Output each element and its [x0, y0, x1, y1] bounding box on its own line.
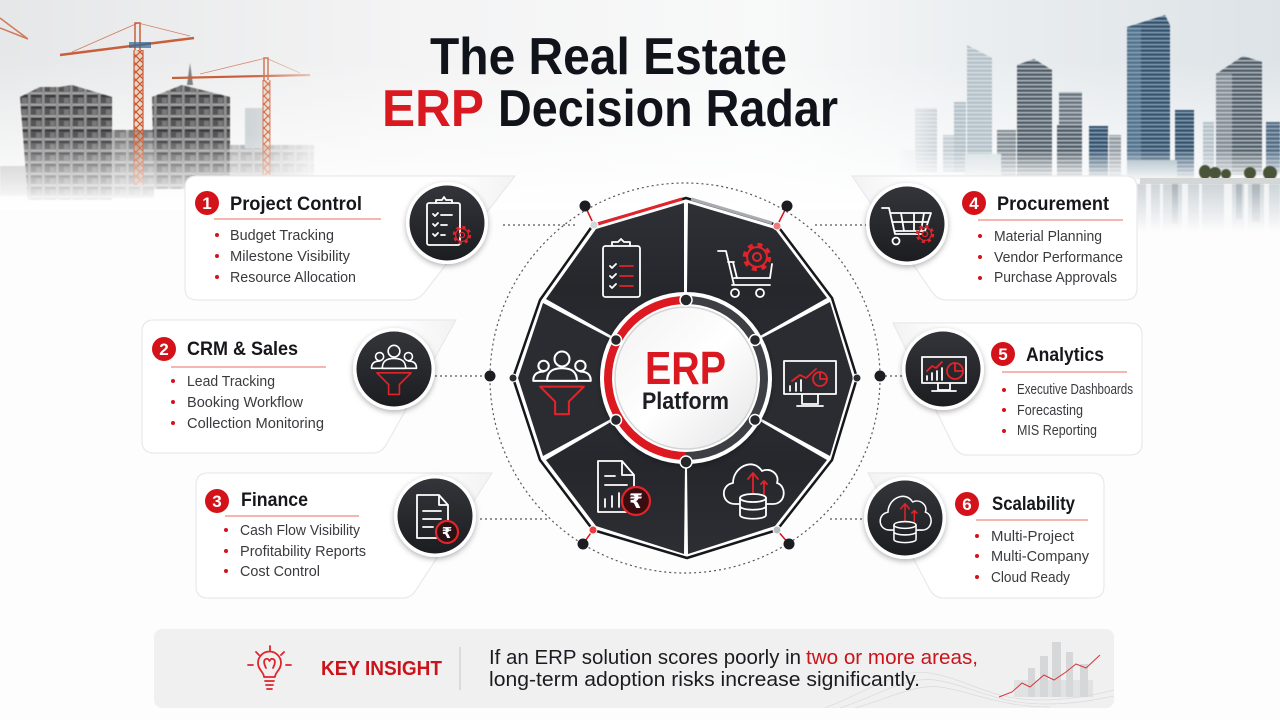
icon: crm badge: [353, 328, 435, 410]
badge 4: 4: [969, 194, 979, 213]
badge 6: [955, 492, 979, 516]
items: MIS Reporting: [1017, 423, 1097, 439]
items: Executive Dashboards: [1017, 382, 1133, 398]
heading: CRM & Sales: [187, 339, 298, 360]
title: The Real Estate: [430, 28, 787, 86]
hub disc: [615, 307, 757, 449]
segment: crm: [518, 303, 686, 456]
items: Milestone Visibility: [230, 249, 351, 265]
heading: Analytics: [1026, 345, 1104, 366]
items: Resource Allocation: [230, 270, 356, 286]
heading: Finance: [241, 490, 308, 511]
segment: procurement: [686, 203, 827, 378]
outer dashed radar circle: [490, 183, 880, 573]
segment: finance: [546, 378, 686, 554]
wheel icon: clipboard: [603, 239, 640, 297]
items: Multi-Company: [991, 549, 1090, 565]
wheel icon: document rupee: [598, 461, 650, 515]
card 6: scalability: [868, 473, 1104, 598]
wheel icon: people funnel: [533, 352, 591, 414]
icon: project control badge: [406, 182, 488, 264]
items: [978, 229, 1123, 286]
items: Cash Flow Visibility: [240, 523, 361, 539]
segment: scalability: [686, 378, 827, 554]
items: Cloud Ready: [991, 570, 1071, 586]
items: Lead Tracking: [187, 374, 275, 390]
heading: Project Control: [230, 194, 362, 215]
icon: analytics badge: [902, 328, 984, 410]
items: Cost Control: [240, 564, 320, 580]
card 1: project control: [185, 176, 515, 300]
header sky background: [0, 0, 1280, 210]
card 2: crm and sales: [142, 320, 456, 453]
badge 4: [962, 191, 986, 215]
hub label: [642, 342, 729, 415]
label: KEY INSIGHT: [321, 658, 442, 680]
badge 1: 1: [202, 194, 212, 213]
hub ring: dark half: [686, 300, 764, 456]
badge 5: [991, 342, 1015, 366]
connector nodes: [484, 200, 886, 550]
wheel icon: cloud database: [724, 464, 784, 519]
badge 2: 2: [159, 340, 169, 359]
items: Booking Workflow: [187, 395, 304, 411]
wheel icon: cart and gear: [718, 245, 772, 297]
items: Collection Monitoring: [187, 416, 324, 432]
items: Budget Tracking: [230, 228, 334, 244]
title: [382, 28, 838, 138]
icon: finance badge: [394, 475, 476, 557]
mini skyline chart: [825, 642, 1114, 708]
heading: Scalability: [992, 494, 1075, 515]
icon: scalability badge: [864, 477, 946, 559]
insight text: If an ERP solution scores poorly in: [489, 647, 801, 669]
items: Forecasting: [1017, 403, 1083, 419]
icon: finance badge: ₹: [442, 525, 452, 542]
segment: analytics: [686, 302, 853, 456]
hub outer ring: [600, 292, 772, 464]
badge 6: 6: [962, 495, 972, 514]
accent edges: [598, 199, 772, 224]
items: Multi-Project: [991, 529, 1074, 545]
badge 2: [152, 337, 176, 361]
wheel icon: monitor analytics: [784, 361, 836, 406]
items: Profitability Reports: [240, 544, 366, 560]
items: [215, 228, 356, 286]
badge 3: 3: [212, 492, 222, 511]
hub ring: red half: [608, 300, 686, 456]
insight text: two or more areas,: [806, 647, 978, 669]
items: [1002, 382, 1133, 439]
items: Purchase Approvals: [994, 270, 1117, 286]
key insight bar: [154, 629, 1114, 708]
badge 1: [195, 191, 219, 215]
wheel icon: document rupee: ₹: [629, 491, 643, 513]
icon: lightbulb: [248, 646, 291, 689]
items: [975, 529, 1090, 586]
hub label: Platform: [642, 388, 729, 415]
skyline photo: [900, 15, 1280, 234]
outer ring: [513, 198, 857, 558]
items: [171, 374, 324, 432]
card 3: finance: [196, 473, 492, 598]
badge 5: 5: [998, 345, 1008, 364]
title: Decision Radar: [498, 80, 838, 138]
badge 3: [205, 489, 229, 513]
segment: project control: [546, 203, 686, 378]
card 4: procurement: [852, 176, 1137, 300]
construction site photo: [0, 18, 314, 200]
connector lines: [435, 225, 905, 519]
icon: procurement badge: [866, 183, 948, 265]
items: [224, 523, 366, 580]
title: ERP: [382, 80, 484, 138]
items: Material Planning: [994, 229, 1102, 245]
insight text: long-term adoption risks increase significantly.: [489, 669, 920, 691]
radar wheel: [484, 198, 886, 558]
heading: Procurement: [997, 194, 1110, 215]
hub label: ERP: [645, 342, 726, 394]
card 5: analytics: [893, 323, 1142, 455]
items: Vendor Performance: [994, 250, 1123, 266]
insight text: [489, 647, 978, 691]
hub nodes: [610, 294, 760, 468]
